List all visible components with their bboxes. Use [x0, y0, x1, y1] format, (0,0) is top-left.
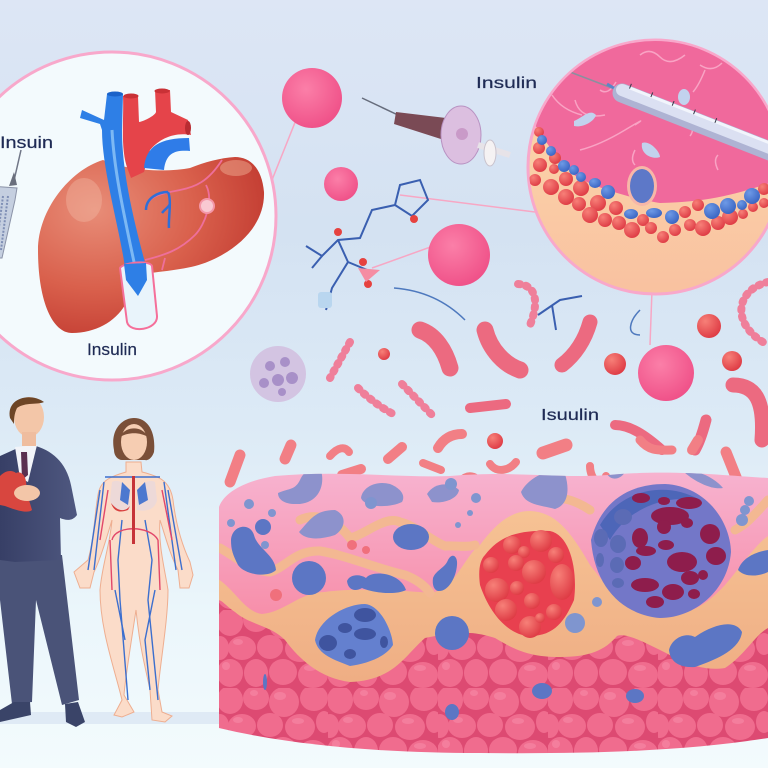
red dots in pink layer	[270, 540, 370, 601]
blood vessels	[88, 477, 182, 700]
red cells	[529, 127, 768, 243]
lesion	[200, 199, 214, 213]
blue arch	[144, 138, 190, 170]
pink ball small	[324, 167, 358, 201]
blue cells in pink layer	[231, 519, 768, 720]
icon: syringe in liver panel	[0, 150, 21, 258]
syringe	[570, 72, 768, 155]
pink ball middle	[428, 224, 490, 286]
figure: man in suit	[0, 397, 85, 727]
head and hair	[113, 418, 154, 460]
jacket	[0, 446, 77, 562]
hand	[14, 485, 40, 501]
molecule small	[538, 296, 582, 330]
lavender cells top	[278, 473, 723, 538]
label: insulin left: Insuin	[0, 133, 53, 152]
label: insulin bottom: Insulin	[87, 340, 137, 359]
blue vein	[80, 92, 145, 264]
shirt and tie	[15, 445, 37, 482]
red balls	[378, 314, 742, 449]
curved strokes	[394, 288, 640, 335]
pink ball top	[282, 68, 342, 128]
pink ball right	[638, 345, 694, 401]
large purple cell	[591, 484, 731, 618]
liver right lobe highlight	[220, 160, 252, 176]
pale cells	[574, 89, 690, 158]
blue vessel bump	[627, 166, 657, 206]
blue cell with holes	[315, 604, 393, 666]
floor shadow	[0, 712, 225, 724]
connector lines	[272, 115, 652, 345]
floating insulin particles	[230, 282, 768, 486]
figure: woman with circulatory system	[74, 418, 193, 722]
texture	[552, 51, 722, 170]
lower red-pink cell layer	[219, 600, 768, 754]
yellow fatty band	[218, 511, 768, 682]
purple cell	[250, 346, 306, 402]
panel: liver circle	[0, 52, 276, 380]
upper fatty band branches	[220, 498, 768, 593]
hepatic branches	[145, 160, 222, 270]
trousers	[0, 555, 79, 705]
icon: central syringe	[362, 98, 510, 166]
panel: tissue cross-section	[218, 464, 768, 760]
organs	[110, 481, 157, 512]
upper pink layer	[219, 472, 768, 614]
aorta red	[123, 88, 191, 178]
beaded chains	[330, 282, 768, 418]
small vesicles	[227, 478, 754, 633]
panel: injection site circle	[528, 20, 768, 294]
liver highlight	[66, 178, 102, 222]
label: insulin right: Isuulin	[541, 407, 599, 424]
molecule diagram	[306, 180, 428, 310]
label: insulin top: Insulin	[476, 75, 537, 92]
head	[10, 397, 44, 446]
tube with insulin	[120, 262, 157, 329]
liver organ	[38, 157, 264, 333]
pink tissue	[536, 41, 768, 203]
central artery	[132, 476, 135, 544]
heart held	[0, 471, 32, 512]
blue cells	[537, 135, 760, 224]
shoes	[0, 702, 85, 727]
red cell pocket	[479, 530, 575, 638]
